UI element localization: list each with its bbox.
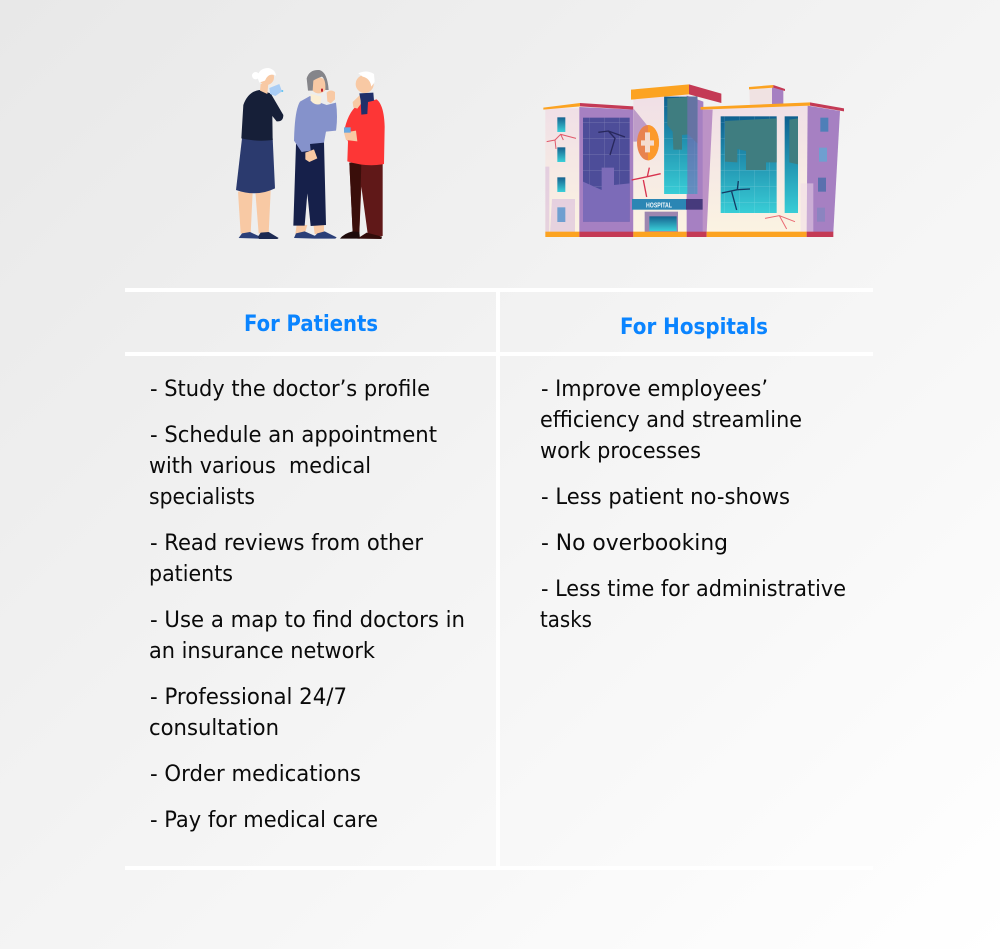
text block: patient benefits: - Pay for medical care [150, 808, 378, 833]
heading: For Patients: For Patients [244, 312, 378, 337]
table grid lines [125, 288, 873, 870]
text block: patient benefits: - Use a map to find doctors in [150, 608, 465, 633]
sign: hospital: HOSPITAL [646, 200, 672, 209]
text block: hospital benefits: - Improve employees’ [541, 377, 768, 402]
text block: patient benefits: an insurance network [149, 639, 375, 664]
text block: hospital benefits: tasks [540, 608, 592, 633]
text block: patient benefits [149, 377, 465, 833]
text block: patient benefits: - Read reviews from other [150, 531, 424, 556]
text block: patient benefits: - Order medications [150, 762, 361, 787]
text block: patient benefits: with various medical [149, 454, 371, 479]
text block: patient benefits: specialists [149, 485, 255, 510]
sign: hospital [632, 199, 703, 210]
figure: man holding his throat and a glass [340, 71, 385, 239]
illustration: three elderly patients [236, 68, 385, 239]
figure: woman with hand to her mouth [293, 70, 337, 239]
text block: patient benefits: - Professional 24/7 [150, 685, 347, 710]
text block: patient benefits: - Schedule an appointment [150, 423, 437, 448]
text block: patient benefits: patients [149, 562, 233, 587]
building: base stripe [545, 232, 833, 237]
heading: For Hospitals: For Hospitals [620, 315, 768, 340]
text block: hospital benefits: - No overbooking [541, 531, 728, 556]
text block: hospital benefits: efficiency and streamline [540, 408, 802, 433]
building: central tower [631, 84, 721, 232]
building: right wing [701, 85, 844, 232]
illustration: cracked hospital building [543, 84, 844, 237]
text block: patient benefits: consultation [149, 716, 279, 741]
text block: hospital benefits: - Less time for administrative [541, 577, 846, 602]
text block: hospital benefits [540, 377, 846, 633]
building: left wing [543, 103, 633, 232]
text block: hospital benefits: - Less patient no-shows [541, 485, 790, 510]
figure: woman coughing into a tissue [236, 68, 283, 239]
text block: hospital benefits: work processes [540, 439, 701, 464]
text block: patient benefits: - Study the doctor’s profile [150, 377, 430, 402]
